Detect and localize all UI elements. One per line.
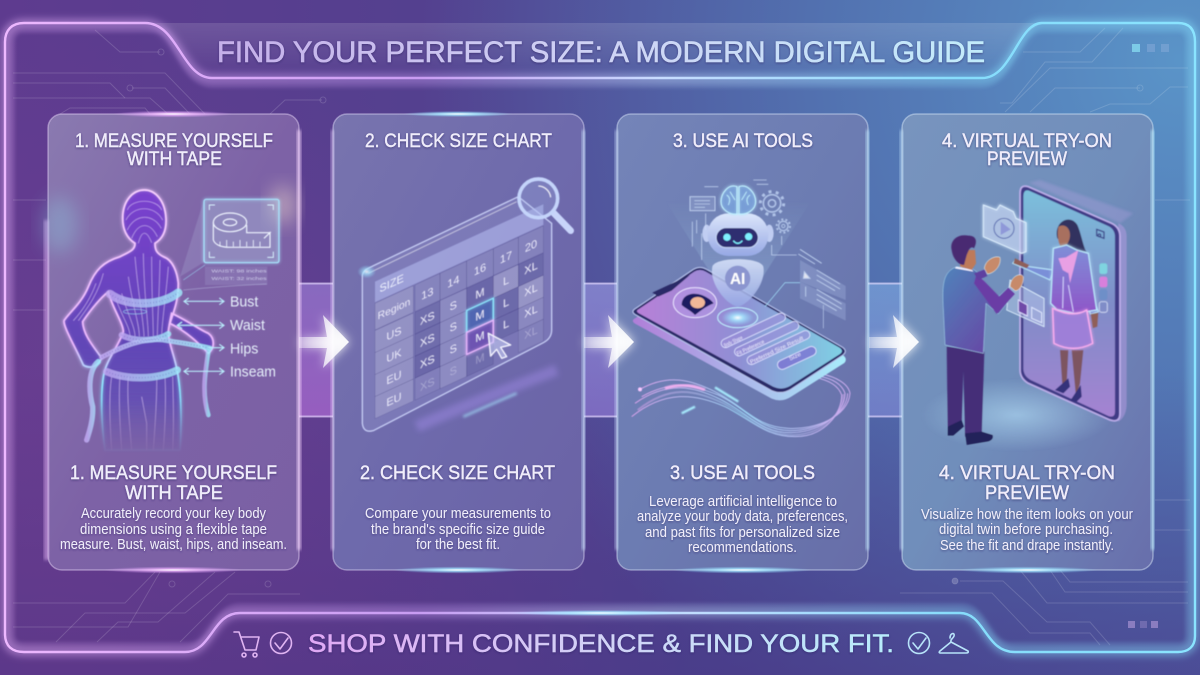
status dots: bottom right	[1128, 621, 1158, 628]
illustration: size chart: EU	[386, 391, 402, 410]
illustration: size chart: M	[475, 286, 485, 302]
step 3 lower heading: 3. USE AI TOOLS	[670, 463, 815, 484]
data stream	[632, 374, 850, 437]
panel: step 4	[900, 114, 1154, 574]
step 3 description: analyze your body data, preferences,	[637, 508, 848, 525]
illustration: size chart: US	[386, 325, 402, 344]
illustration: size chart: 14	[447, 274, 460, 291]
status dots: top right	[1132, 44, 1169, 52]
illustration: AI phone: Fit Preference	[736, 339, 766, 357]
measurement labels: Waist	[230, 318, 265, 334]
man customer	[943, 235, 1023, 445]
phone UI rows	[720, 312, 818, 371]
illustration: size chart: S	[450, 342, 457, 357]
step 3 description	[637, 493, 848, 556]
step 1 description: measure. Bust, waist, hips, and inseam.	[60, 536, 287, 553]
step 2 description	[365, 505, 551, 553]
brain	[721, 186, 756, 214]
illustration: size chart: XS	[420, 353, 435, 371]
illustration: size chart: 20	[525, 238, 537, 255]
illustration: size chart: S	[450, 299, 457, 314]
panel: step 1	[42, 110, 301, 574]
illustration: size chart: S	[450, 364, 457, 379]
step 1 lower heading	[70, 463, 277, 504]
title band	[150, 23, 1045, 78]
arrow: step 1 to 2	[299, 315, 349, 368]
icon: check	[908, 632, 930, 654]
step 4 lower heading: PREVIEW	[985, 483, 1069, 504]
cursor	[488, 333, 511, 358]
measurement labels	[177, 295, 276, 381]
illustration: size chart: XL	[524, 324, 538, 342]
illustration: size chart: L	[503, 274, 510, 289]
illustration: size chart: M	[475, 308, 485, 324]
illustration: AI phone: Size	[788, 352, 802, 362]
illustration: size chart: M	[475, 330, 485, 345]
step 1 description	[60, 505, 287, 553]
icon: cart	[234, 632, 259, 657]
illustration: size chart: Region	[378, 296, 410, 323]
footer tagline: SHOP WITH CONFIDENCE & FIND YOUR FIT.	[308, 630, 894, 658]
illustration: size chart: 13	[421, 286, 433, 303]
illustration: size chart: XS	[420, 332, 435, 350]
step 1 top heading: 1. MEASURE YOURSELF	[75, 131, 273, 152]
measurement labels: Bust	[230, 295, 258, 311]
step 3 description: and past fits for personalized size	[645, 524, 840, 541]
woman avatar	[1013, 220, 1098, 402]
step 2 description: the brand's specific size guide	[371, 521, 545, 538]
illustration: body with tape	[64, 190, 279, 450]
illustration: size chart: S	[450, 320, 457, 335]
footer icons left	[234, 632, 292, 657]
step 4 lower heading: 4. VIRTUAL TRY-ON	[939, 463, 1115, 484]
arrow: step 2 to 3	[584, 315, 634, 368]
floating data cards	[690, 180, 846, 328]
smart mirror	[1020, 180, 1133, 422]
step 3 description: Leverage artificial intelligence to	[649, 493, 837, 510]
step 3 description: recommendations.	[688, 539, 797, 556]
icon: hanger	[939, 634, 968, 653]
illustration: size chart: 16	[474, 262, 486, 279]
illustration: size chart: UK	[386, 347, 402, 366]
step 1 top heading: WITH TAPE	[127, 149, 222, 170]
step 1 lower heading: 1. MEASURE YOURSELF	[70, 463, 277, 484]
tape measure callout: WAIST: 32 inches	[211, 276, 267, 282]
illustration: size chart	[357, 179, 571, 431]
step 2 description: Compare your measurements to	[365, 505, 551, 522]
measurement labels: Hips	[230, 341, 258, 357]
floating garment card	[1007, 280, 1044, 327]
arrow: step 3 to 4	[869, 315, 919, 368]
footer icons right	[908, 632, 968, 654]
step 1 lower heading: WITH TAPE	[125, 483, 223, 504]
illustration: size chart: XL	[524, 260, 538, 277]
step 1 description: dimensions using a flexible tape	[80, 521, 267, 538]
AI robot: AI	[730, 271, 745, 288]
step 4 top heading: 4. VIRTUAL TRY-ON	[942, 131, 1112, 152]
illustration: virtual try-on	[920, 180, 1133, 452]
panel: step 2	[331, 111, 585, 574]
phone body	[633, 273, 846, 400]
illustration: size chart: M	[475, 352, 485, 367]
illustration: AI phone	[632, 180, 850, 437]
step 1 top heading	[75, 131, 273, 170]
magnifier	[519, 179, 571, 231]
floating camera card	[983, 205, 1026, 253]
illustration: size chart: XL	[524, 303, 538, 321]
step 2 description: for the best fit.	[416, 536, 500, 553]
step 4 description: digital twin before purchasing.	[939, 521, 1113, 538]
illustration: size chart: L	[503, 317, 510, 332]
illustration: AI phone: Body Shape	[723, 335, 744, 349]
step 4 lower heading	[939, 463, 1115, 504]
tape measure callout: WAIST: 98 inches	[211, 268, 267, 274]
illustration: size chart: 17	[500, 250, 512, 267]
step 4 description: See the fit and drape instantly.	[940, 537, 1114, 554]
illustration: size chart: XS	[420, 310, 435, 328]
AI robot	[702, 213, 774, 307]
illustration: AI phone: Preferred Size Result	[749, 336, 805, 366]
illustration: size chart: EU	[386, 369, 402, 388]
illustration: size chart: L	[503, 296, 510, 311]
step 4 description	[921, 506, 1133, 554]
step 4 description: Visualize how the item looks on your	[921, 506, 1133, 523]
step 3 top heading: 3. USE AI TOOLS	[673, 131, 813, 152]
measurement labels: Inseam	[230, 365, 276, 381]
illustration: size chart: SIZE	[379, 273, 404, 295]
step 4 top heading	[942, 131, 1112, 170]
avatar	[673, 288, 717, 318]
illustration: size chart: XL	[524, 282, 538, 299]
connector bands	[296, 283, 905, 417]
step 1 description: Accurately record your key body	[81, 505, 266, 522]
step 2 lower heading: 2. CHECK SIZE CHART	[360, 463, 555, 484]
tape measure callout	[180, 199, 279, 290]
gears	[760, 192, 790, 233]
step 4 top heading: PREVIEW	[987, 149, 1067, 170]
illustration: size chart: XS	[420, 376, 435, 394]
icon: check	[270, 632, 292, 654]
panel: step 3	[615, 114, 869, 574]
step 2 top heading: 2. CHECK SIZE CHART	[365, 131, 552, 152]
title: FIND YOUR PERFECT SIZE: A MODERN DIGITAL GUIDE	[217, 36, 985, 69]
